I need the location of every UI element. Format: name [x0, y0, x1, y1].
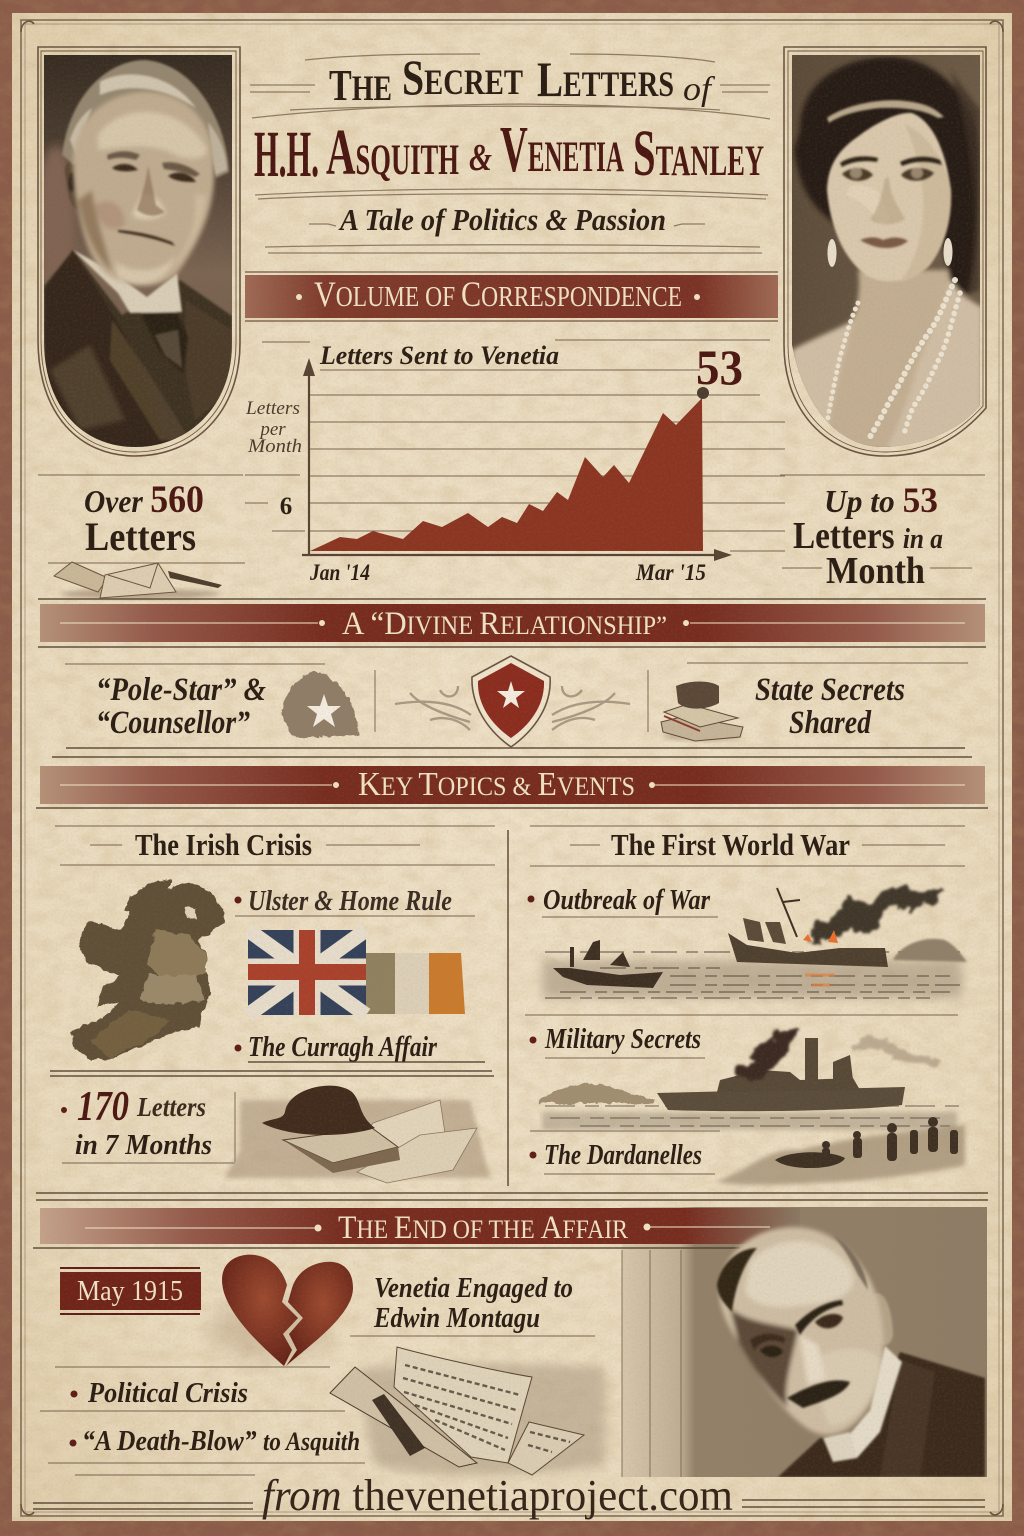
stat: up to 53 letters in a month: Up to 53 — [824, 480, 938, 520]
stat: 170 letters: in 7 Months — [75, 1129, 212, 1161]
y axis label: Letters — [245, 398, 300, 419]
stat: up to 53 letters in a month — [780, 475, 985, 592]
divider — [507, 830, 509, 1186]
title — [254, 49, 764, 237]
stat: over 560 letters — [38, 475, 245, 563]
title line: names: VENETIA — [500, 113, 624, 186]
title rules — [250, 54, 770, 253]
stat: 170 letters — [61, 1084, 235, 1163]
banner: A Divine Relationship: A “DIVINE RELATIONSHIP” — [342, 606, 667, 642]
title line: The Secret Letters of: LETTERS — [537, 51, 674, 107]
panel: The End of the Affair: Edwin Montagu — [373, 1303, 540, 1334]
map: Ireland — [72, 880, 225, 1060]
title line: names: H.H. — [254, 118, 319, 191]
illustration: hat, book and letters — [225, 1086, 490, 1183]
y axis value: 6 — [280, 493, 292, 520]
axes — [302, 372, 716, 556]
icon: envelopes and pen — [54, 562, 222, 599]
quote: state secrets shared: State Secrets — [755, 672, 905, 708]
peak value: 53 — [696, 339, 743, 395]
icon: inkwell on books — [661, 682, 743, 741]
chart grid lines — [245, 340, 785, 551]
flourishes — [395, 686, 630, 730]
flag: Union Jack — [248, 930, 366, 1015]
area series — [310, 398, 703, 551]
stat: 170 letters: 170 — [77, 1084, 129, 1130]
portrait: Edwin Montagu — [717, 1227, 985, 1477]
y axis label — [245, 398, 302, 457]
illustration: torn newspaper — [330, 1347, 605, 1475]
stat: up to 53 letters in a month: Month — [826, 550, 925, 592]
date label: May 1915 — [77, 1276, 183, 1307]
stat: over 560 letters: Letters — [85, 514, 196, 559]
portrait background: Montagu panel — [622, 1207, 987, 1477]
title line: The Secret Letters of: SECRET — [402, 49, 523, 105]
text: Venetia engaged: Venetia Engaged to — [374, 1273, 573, 1304]
bullet: A Death-Blow to Asquith: “A Death-Blow” to Asquith — [82, 1425, 360, 1457]
title line: names: & — [469, 137, 492, 179]
quote: pole-star and counsellor: “Pole-Star” & — [96, 672, 266, 708]
banner: Volume of Correspondence: VOLUME OF CORRESPONDENCE — [314, 274, 682, 314]
banner: Key Topics and Events: KEY TOPICS & EVENTS — [358, 766, 635, 803]
title line: The Secret Letters of: THE — [329, 61, 392, 110]
bullet: Political Crisis: Political Crisis — [87, 1377, 248, 1409]
banner: Volume of Correspondence — [245, 272, 778, 321]
date label — [60, 1268, 201, 1314]
heading: Irish Crisis: The Irish Crisis — [135, 827, 312, 862]
heading: First World War: The First World War — [611, 827, 850, 862]
illustration: burning ships at sea — [542, 886, 967, 998]
x axis start: Jan '14 — [309, 560, 370, 585]
chart title: Letters Sent to Venetia — [319, 341, 559, 370]
stat: up to 53 letters in a month: Letters in a — [793, 515, 943, 557]
icon: broken heart — [210, 1255, 353, 1366]
banner: A Divine Relationship — [38, 599, 986, 642]
panel: The First World War — [525, 826, 967, 1185]
title line: names: STANLEY — [633, 117, 764, 190]
title line: names — [254, 113, 764, 191]
panel: The Irish Crisis — [50, 826, 495, 1183]
x axis end: Mar '15 — [635, 560, 706, 585]
illustration: warship under fire — [538, 1030, 960, 1130]
footer: source — [33, 1471, 985, 1520]
illustration: troops on the beach — [715, 1117, 965, 1185]
portrait: H.H. Asquith — [36, 47, 240, 456]
footer: source: from thevenetiaproject.com — [262, 1471, 733, 1520]
title line: names: ASQUITH — [326, 116, 459, 189]
stat: 170 letters: Letters — [136, 1092, 206, 1122]
subtitle: A Tale of Politics & Passion — [338, 202, 666, 237]
bullet: The Curragh Affair: The Curragh Affair — [248, 1032, 438, 1063]
stat: over 560 letters: Over 560 — [84, 478, 204, 521]
banner: The End of the Affair — [33, 1208, 800, 1248]
bullet: Ulster and Home Rule: Ulster & Home Rule — [248, 886, 452, 917]
panel: The End of the Affair — [40, 1255, 605, 1475]
panel: divine relationship: “Counsellor” — [96, 705, 250, 741]
portrait: Venetia Stanley — [784, 47, 986, 456]
bullet: Outbreak of War: Outbreak of War — [543, 885, 711, 916]
rule above end section — [36, 1193, 988, 1200]
y axis label: Month — [247, 436, 302, 457]
panel: divine relationship: Shared — [789, 705, 871, 741]
y axis label: per — [258, 419, 286, 440]
title line: The Secret Letters of: of — [683, 71, 716, 108]
bullet: The Dardanelles: The Dardanelles — [544, 1140, 702, 1171]
banner: The End of the Affair: THE END OF THE AFFAIR — [338, 1210, 629, 1246]
bullet: Military Secrets: Military Secrets — [544, 1024, 701, 1055]
icon: shield with star — [472, 656, 550, 747]
banner: Key Topics and Events — [36, 766, 988, 808]
chart: letters sent to Venetia — [245, 339, 785, 585]
panel: divine relationship — [38, 647, 986, 757]
peak marker — [697, 387, 709, 399]
icon: star stone — [283, 672, 358, 738]
title line: The Secret Letters of — [329, 49, 716, 110]
flag: Irish tricolour — [364, 953, 465, 1014]
